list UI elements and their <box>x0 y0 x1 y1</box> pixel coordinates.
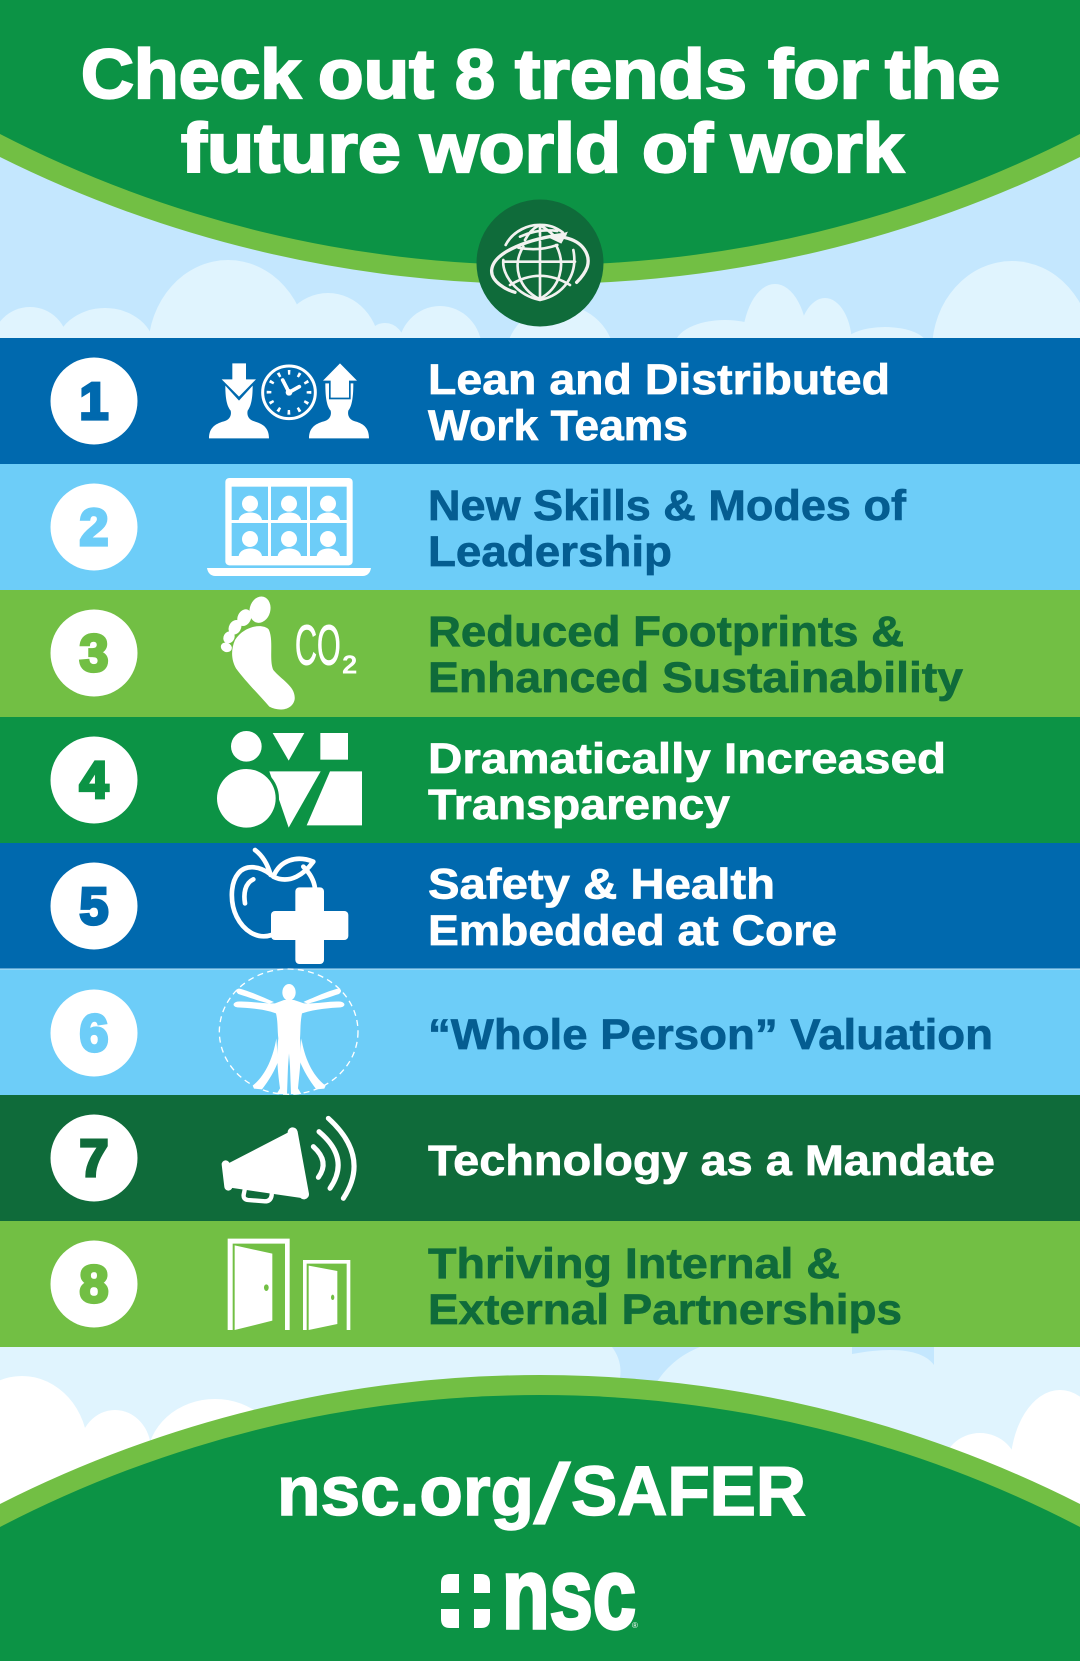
title: out <box>318 35 434 113</box>
number badge 3: 3 <box>80 625 108 683</box>
number badge 4: 4 <box>80 752 109 810</box>
title: work <box>730 109 904 187</box>
icon: globe badge <box>476 200 604 326</box>
number badge 1 <box>50 358 138 444</box>
label 1: Work Teams <box>428 402 688 450</box>
label 8: External Partnerships <box>428 1286 902 1334</box>
website url: nsc.org <box>277 1452 534 1530</box>
row 4 <box>0 717 1080 843</box>
row 6 <box>0 968 1080 1095</box>
title <box>81 35 1000 187</box>
label 5: Safety & Health <box>428 860 775 908</box>
row 5 <box>0 843 1080 969</box>
number badge 6: 6 <box>80 1005 108 1063</box>
icon: people exchanging with clock <box>209 363 369 438</box>
title: the <box>885 35 1000 113</box>
NSC logo: ® <box>632 1621 638 1630</box>
website url <box>277 1447 806 1541</box>
label 4: Transparency <box>428 781 730 829</box>
label 8: Thriving Internal & <box>428 1240 840 1288</box>
lower sky with clouds <box>0 1347 1080 1560</box>
label 6: “Whole Person” Valuation <box>428 1011 993 1059</box>
label 3: Enhanced Sustainability <box>428 654 963 702</box>
row 2 <box>0 464 1080 590</box>
number badge 1: 1 <box>80 373 108 431</box>
title: future <box>181 109 401 187</box>
label 2: New Skills & Modes of <box>428 482 907 530</box>
sky background with clouds <box>0 0 1080 440</box>
website url: / <box>534 1447 571 1541</box>
label 3 <box>428 608 963 702</box>
label 5 <box>428 860 837 955</box>
number badge 3 <box>50 610 138 696</box>
number badge 5 <box>50 862 138 950</box>
top green arc banner <box>0 0 1080 284</box>
icon: transparent shapes <box>214 731 362 831</box>
title: trends <box>515 35 747 113</box>
label 2 <box>428 482 907 576</box>
label 3: Reduced Footprints & <box>428 608 904 656</box>
number badge 6 <box>50 990 138 1076</box>
label 7: Technology as a Mandate <box>428 1137 995 1185</box>
row 8 <box>0 1221 1080 1347</box>
label 4: Dramatically Increased <box>428 735 946 783</box>
label 1: Lean and Distributed <box>428 356 890 404</box>
icon: open doors <box>228 1239 350 1330</box>
number badge 8 <box>50 1240 138 1328</box>
website url: SAFER <box>571 1452 806 1530</box>
icon: megaphone <box>226 1118 354 1201</box>
title: for <box>768 35 869 113</box>
number badge 4 <box>50 736 138 824</box>
row 7 <box>0 1095 1080 1221</box>
label 2: Leadership <box>428 528 672 576</box>
label 1 <box>428 356 890 450</box>
bottom green arc banner <box>0 1375 1080 1661</box>
number badge 7 <box>50 1114 138 1202</box>
NSC logo: nsc <box>502 1538 636 1650</box>
label 5: Embedded at Core <box>428 907 837 955</box>
number badge 7: 7 <box>80 1130 108 1188</box>
title: of <box>642 109 714 187</box>
icon: laptop video call <box>207 478 371 576</box>
title: world <box>419 109 621 187</box>
icon: footprint and CO2: CO <box>295 614 341 677</box>
label 4 <box>428 735 946 829</box>
icon: Vitruvian figure <box>219 969 358 1094</box>
label 8 <box>428 1240 902 1334</box>
number badge 8: 8 <box>80 1256 108 1314</box>
icon: footprint and CO2: 2 <box>342 649 357 679</box>
number badge 2: 2 <box>80 499 108 557</box>
row 3 <box>0 590 1080 717</box>
row 1 <box>0 338 1080 464</box>
title: 8 <box>455 35 495 113</box>
number badge 5: 5 <box>80 878 108 936</box>
icon: apple and medical cross <box>232 850 348 964</box>
icon: footprint and CO2 <box>219 594 357 710</box>
number badge 2 <box>50 484 138 570</box>
title: Check <box>81 35 301 113</box>
NSC logo <box>441 1538 638 1650</box>
